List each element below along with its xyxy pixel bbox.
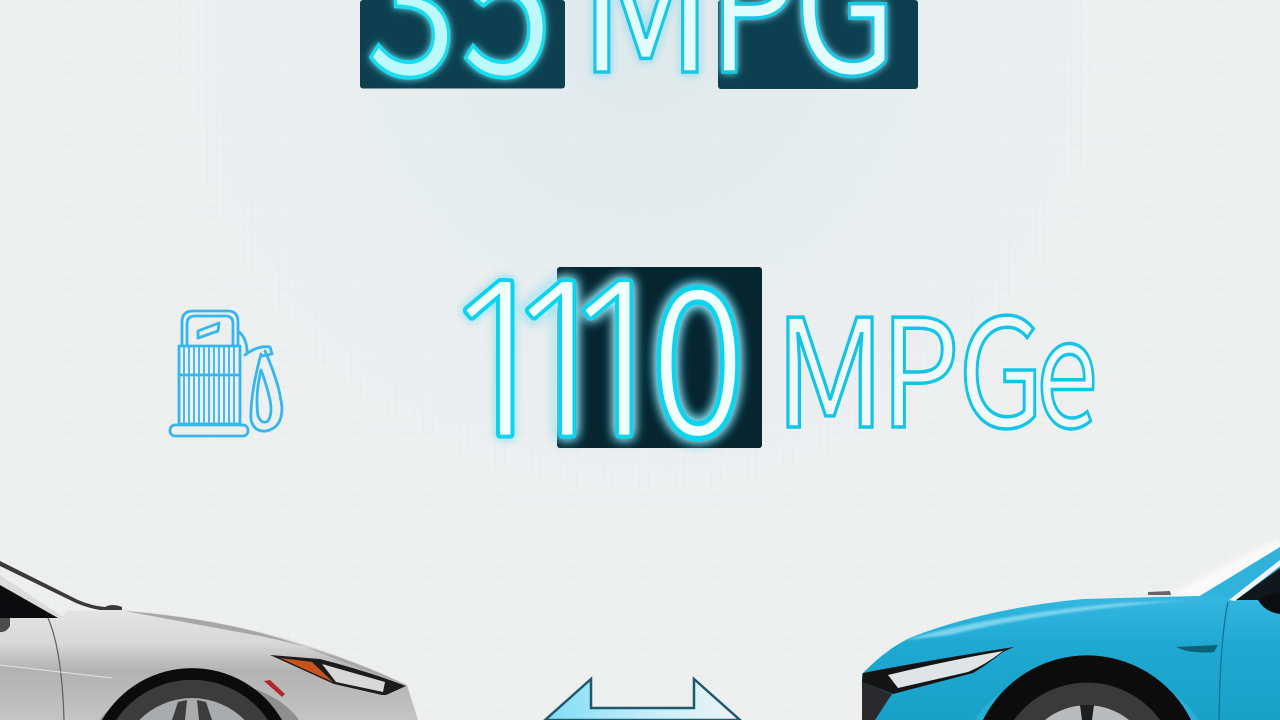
- blue fender lip: [975, 670, 1198, 720]
- inner digits: [497, 199, 746, 496]
- blue windshield panel: [1198, 547, 1280, 720]
- blue window frame: [1229, 560, 1280, 601]
- blue wheel arch: [983, 655, 1191, 720]
- silver body crease: [0, 665, 112, 678]
- blue window: [1236, 568, 1280, 612]
- silver headlight: [270, 655, 406, 695]
- dark box behind PG: [718, 0, 918, 89]
- blue grille: [862, 682, 892, 720]
- silver pale glass frame: [0, 575, 65, 618]
- inner digits: 1: [497, 257, 624, 467]
- silver wheel arch: [102, 668, 282, 720]
- arrow: double-headed comparison: [545, 679, 740, 720]
- car: silver sedan: [0, 561, 418, 720]
- blue side mirror: [1258, 592, 1280, 614]
- silver fender lip: [100, 680, 299, 720]
- unit MPGe: P: [880, 254, 960, 471]
- silver roof line and mirror: [0, 561, 122, 610]
- silver door seam: [48, 618, 64, 720]
- silver window: [0, 585, 58, 618]
- blue windshield highlight: [1170, 538, 1280, 598]
- unit MPGe: e: [1036, 254, 1098, 471]
- blue tyre: [1014, 683, 1160, 720]
- blue vent: [1176, 645, 1218, 652]
- dark box behind 35: [360, 0, 565, 88]
- silver side marker: [264, 680, 285, 697]
- silver tyre: [116, 680, 268, 720]
- unit MPG: [578, 0, 897, 128]
- unit MPGe: G: [958, 254, 1044, 471]
- metric: 35 MPG: [360, 0, 918, 135]
- silver rim: [139, 698, 245, 720]
- value 35: [366, 0, 553, 135]
- silver mirror base: [0, 618, 10, 632]
- inner digits: 0: [650, 199, 746, 496]
- blue body: [862, 596, 1280, 720]
- value 110: [435, 199, 746, 496]
- blue door seam: [1219, 602, 1228, 720]
- silver hood crease: [125, 611, 404, 684]
- metric: 110 MPGe: [435, 199, 1098, 496]
- blue headlight: [862, 647, 1014, 694]
- blue rim: [1045, 705, 1129, 720]
- dark box behind value: [557, 267, 762, 448]
- blue hood highlight: [905, 600, 1195, 640]
- inner digits: 1: [554, 257, 681, 467]
- unit MPGe: M: [774, 254, 886, 471]
- leading digit: 1: [435, 257, 562, 467]
- car: blue hatchback: [862, 538, 1280, 720]
- silver body: [0, 610, 418, 720]
- blue mirror stub: [1148, 591, 1171, 595]
- icon: fuel pump: [170, 311, 282, 436]
- unit MPGe: [774, 254, 1098, 471]
